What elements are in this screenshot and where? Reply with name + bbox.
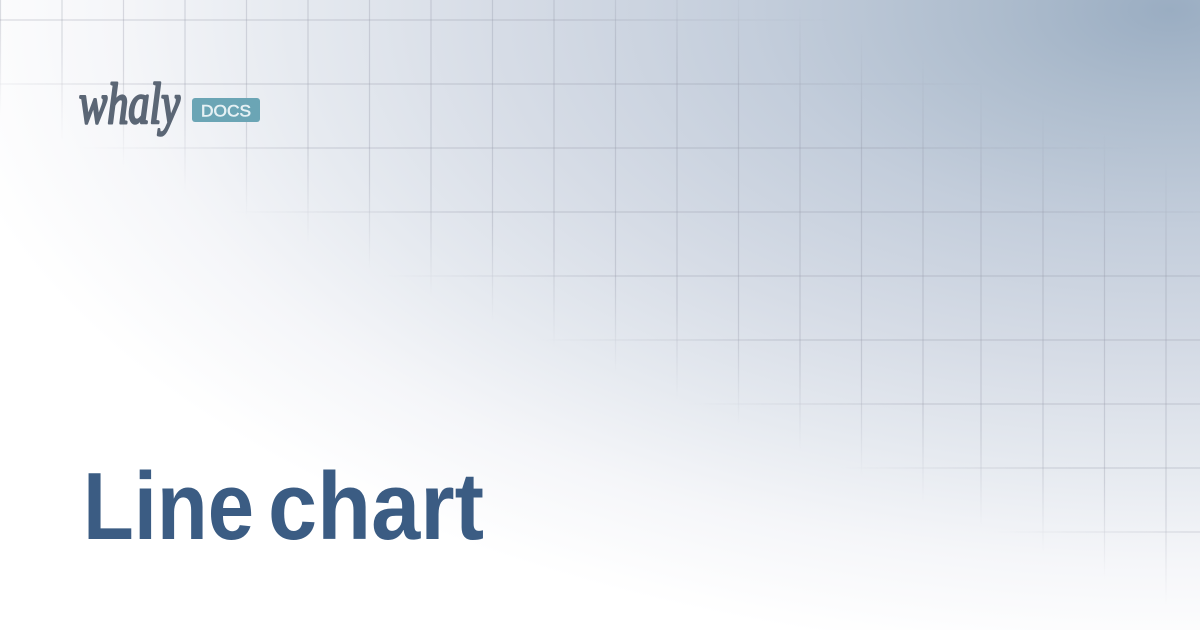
docs badge: DOCS (201, 102, 251, 120)
docs badge (192, 98, 260, 122)
logo: whaly docs (79, 71, 260, 137)
title (83, 453, 484, 560)
logo wordmark: whaly (79, 71, 180, 136)
title: Line (83, 453, 254, 560)
title: chart (268, 453, 484, 560)
